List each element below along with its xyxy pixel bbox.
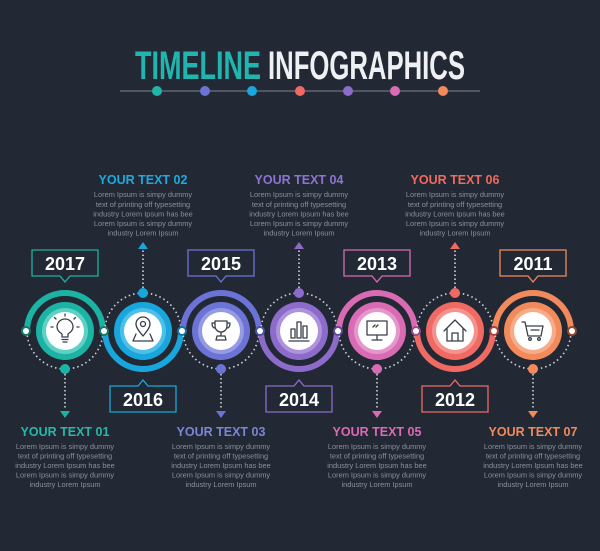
text block 04: text of printing off typesetting — [252, 200, 346, 209]
step 5: 2013 — [339, 250, 415, 418]
text block 07: industry Lorem Ipsum has bee — [483, 461, 583, 470]
text block 05 — [327, 425, 427, 489]
label 2011: 2011 — [513, 254, 553, 274]
text block 03: Lorem Ipsum is simpy dummy — [172, 470, 270, 480]
label 2011 — [500, 250, 566, 282]
step 7: 2011 — [495, 250, 571, 418]
text block 07 — [483, 425, 583, 489]
label 2017: 2017 — [45, 254, 85, 274]
text block 04: industry Lorem Ipsum has bee — [249, 210, 349, 218]
step 1: 2017 — [27, 250, 103, 418]
label 2016: 2016 — [123, 390, 163, 410]
text block 01: text of printing off typesetting — [18, 452, 112, 460]
text block 07: text of printing off typesetting — [486, 452, 580, 460]
text block 04: Lorem Ipsum is simpy dummy — [250, 190, 348, 199]
icon: house — [444, 320, 466, 341]
step 4: 2014 — [261, 242, 337, 412]
text block 06: text of printing off typesetting — [408, 200, 502, 209]
text block 07: Lorem Ipsum is simpy dummy — [484, 442, 582, 451]
text block 05: Lorem Ipsum is simpy dummy — [328, 442, 426, 451]
text block 02: industry Lorem Ipsum has bee — [93, 210, 193, 218]
text block 03: YOUR TEXT 03 — [177, 425, 265, 439]
text block 06: Lorem Ipsum is simpy dummy — [406, 219, 504, 228]
text block 04 — [249, 173, 349, 238]
text block 03: text of printing off typesetting — [174, 452, 268, 460]
label 2013 — [344, 250, 410, 282]
text block 05: text of printing off typesetting — [330, 452, 424, 460]
text block 05: industry Lorem Ipsum has bee — [327, 461, 427, 470]
text block 04: YOUR TEXT 04 — [255, 173, 343, 187]
icon: monitor — [367, 321, 387, 340]
text block 06: YOUR TEXT 06 — [411, 173, 499, 187]
text block 01: industry Lorem Ipsum has bee — [15, 461, 115, 470]
text block 06: Lorem Ipsum is simpy dummy — [406, 190, 504, 199]
title: TIMELINE — [135, 44, 261, 88]
text block 01: Lorem Ipsum is simpy dummy — [16, 442, 114, 451]
text block 03: industry Lorem Ipsum has bee — [171, 461, 271, 470]
text block 06 — [405, 173, 505, 238]
text block 03: industry Lorem Ipsum — [185, 480, 257, 489]
text block 05: Lorem Ipsum is simpy dummy — [328, 470, 426, 480]
text block 02 — [93, 173, 193, 238]
label 2014: 2014 — [279, 390, 319, 410]
text block 05: YOUR TEXT 05 — [333, 425, 421, 439]
label 2017 — [32, 250, 98, 282]
text block 02: Lorem Ipsum is simpy dummy — [94, 190, 192, 199]
text block 02: text of printing off typesetting — [96, 200, 190, 209]
text block 06: industry Lorem Ipsum has bee — [405, 210, 505, 218]
icon: trophy — [212, 321, 230, 340]
text block 01 — [15, 425, 115, 489]
text block 07: Lorem Ipsum is simpy dummy — [484, 470, 582, 480]
label 2012: 2012 — [435, 390, 475, 410]
text block 02: industry Lorem Ipsum — [107, 228, 179, 238]
label 2015: 2015 — [201, 254, 241, 274]
text block 06: industry Lorem Ipsum — [419, 228, 491, 238]
text block 05: industry Lorem Ipsum — [341, 480, 413, 489]
text block 02: Lorem Ipsum is simpy dummy — [94, 219, 192, 228]
step 2: 2016 — [105, 242, 181, 412]
text block 01: Lorem Ipsum is simpy dummy — [16, 470, 114, 480]
text block 01: YOUR TEXT 01 — [21, 425, 109, 439]
icon: bar chart — [289, 322, 309, 341]
icon: cart — [522, 322, 543, 340]
text block 04: Lorem Ipsum is simpy dummy — [250, 219, 348, 228]
label 2013: 2013 — [357, 254, 397, 274]
label 2015 — [188, 250, 254, 282]
label 2012 — [422, 380, 488, 412]
text block 07: industry Lorem Ipsum — [497, 480, 569, 489]
text block 02: YOUR TEXT 02 — [99, 173, 187, 187]
title: INFOGRAPHICS — [268, 44, 465, 88]
step 6: 2012 — [417, 242, 493, 412]
icon: bulb — [51, 314, 79, 342]
title — [135, 44, 465, 88]
text block 03: Lorem Ipsum is simpy dummy — [172, 442, 270, 451]
text block 04: industry Lorem Ipsum — [263, 228, 335, 238]
text block 01: industry Lorem Ipsum — [29, 480, 101, 489]
text block 03 — [171, 425, 271, 489]
connector dots — [21, 326, 577, 336]
label 2016 — [110, 380, 176, 412]
icon: map pin — [133, 317, 153, 341]
text block 07: YOUR TEXT 07 — [489, 425, 577, 439]
label 2014 — [266, 380, 332, 412]
step 3: 2015 — [183, 250, 259, 418]
title underline with dots — [120, 86, 480, 96]
